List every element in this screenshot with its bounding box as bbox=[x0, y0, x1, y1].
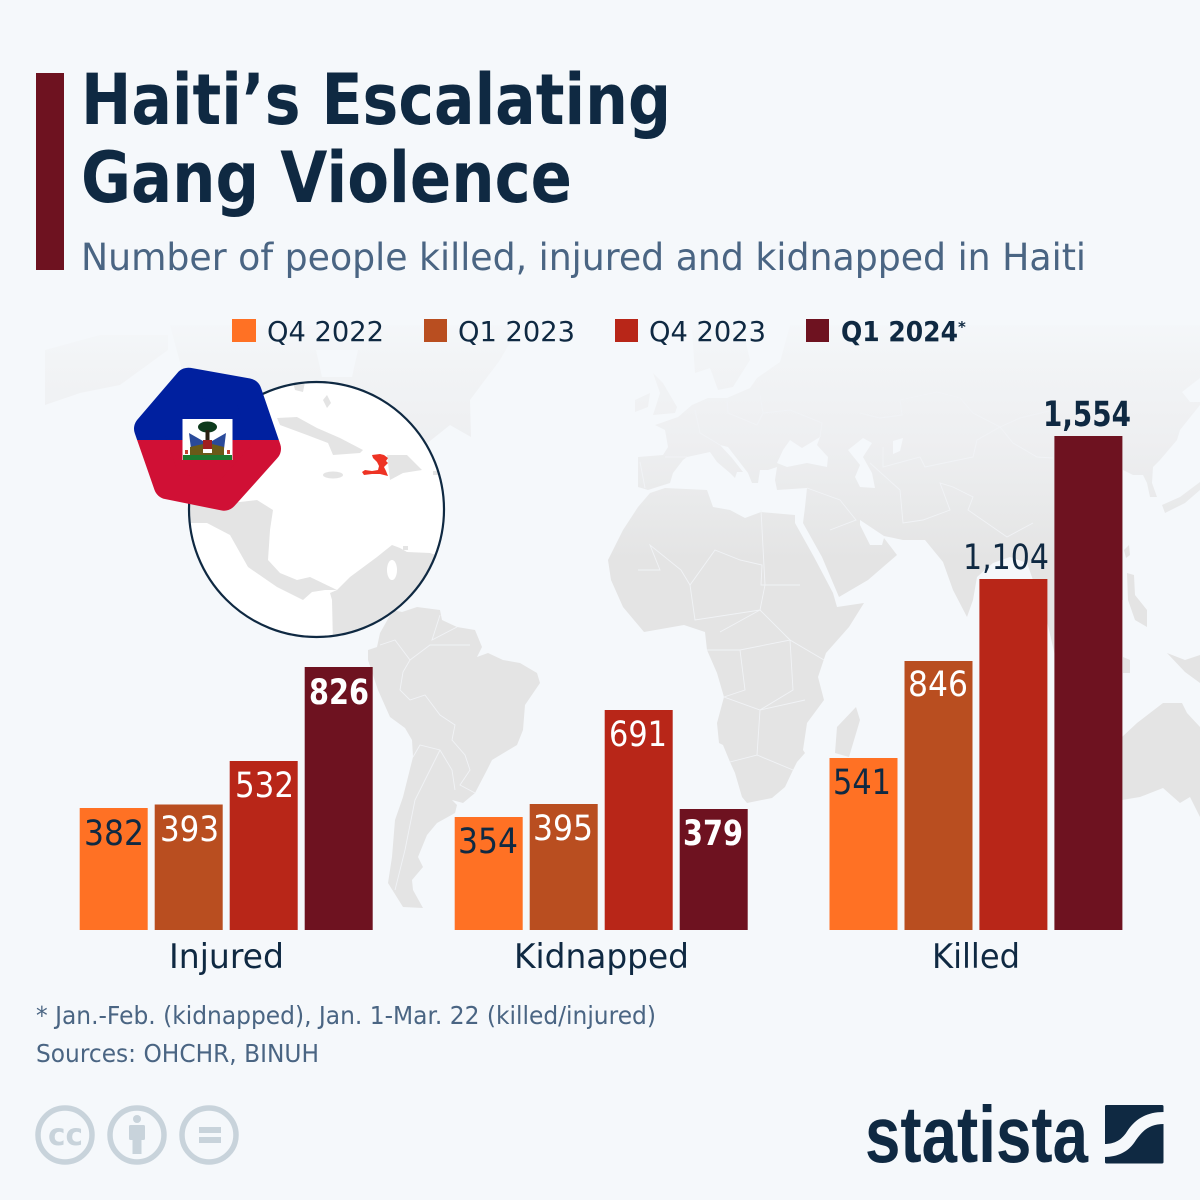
group: Killed bbox=[830, 395, 1131, 977]
icon: Haiti flag badge bbox=[148, 382, 267, 497]
legend bbox=[232, 315, 966, 348]
icons: creative commons licence: cc bbox=[48, 1118, 83, 1153]
group: Injured: 382 bbox=[84, 814, 144, 854]
world map backdrop bbox=[45, 325, 1200, 908]
group: Kidnapped: Kidnapped bbox=[514, 937, 689, 977]
group: Kidnapped: 691 bbox=[609, 715, 667, 755]
footnote and sources: * Jan.-Feb. (kidnapped), Jan. 1-Mar. 22 (killed/injured) bbox=[36, 1001, 656, 1030]
group: Killed: 541 bbox=[833, 763, 891, 803]
legend: Q4 2023 bbox=[649, 315, 766, 348]
legend: Q4 2022 bbox=[267, 315, 384, 348]
title bbox=[81, 59, 671, 219]
group: Kidnapped: 395 bbox=[533, 809, 593, 849]
legend: Q1 2024 bbox=[841, 315, 958, 348]
title: Gang Violence bbox=[81, 137, 572, 219]
legend: Q1 2023 bbox=[458, 315, 575, 348]
footnote and sources bbox=[36, 1001, 656, 1068]
group: Killed: 1,104 bbox=[963, 538, 1049, 578]
group: Killed: Killed bbox=[932, 937, 1020, 977]
group: Killed: 846 bbox=[908, 665, 968, 705]
bar chart bbox=[80, 395, 1131, 977]
title: Haiti’s Escalating bbox=[81, 59, 671, 141]
footnote and sources: Sources: OHCHR, BINUH bbox=[36, 1039, 319, 1068]
group: Kidnapped: 354 bbox=[458, 822, 518, 862]
group: Kidnapped: 379 bbox=[683, 814, 743, 854]
group: Kidnapped bbox=[455, 710, 748, 977]
group: Injured: 393 bbox=[160, 810, 219, 850]
title accent bar bbox=[36, 73, 64, 270]
icon: Haiti highlighted bbox=[362, 454, 388, 476]
group: Killed: 1,554 bbox=[1043, 395, 1131, 435]
locator map circle bbox=[185, 382, 450, 645]
group: Injured: 532 bbox=[235, 766, 294, 806]
group: Injured: 826 bbox=[309, 673, 369, 713]
group: Injured bbox=[80, 667, 373, 977]
icons: creative commons licence bbox=[38, 1108, 236, 1162]
logo: Statista: statista bbox=[865, 1090, 1088, 1179]
subtitle: Number of people killed, injured and kidnapped in Haiti bbox=[81, 236, 1086, 279]
legend: * bbox=[958, 318, 966, 336]
group: Injured: Injured bbox=[169, 937, 284, 977]
